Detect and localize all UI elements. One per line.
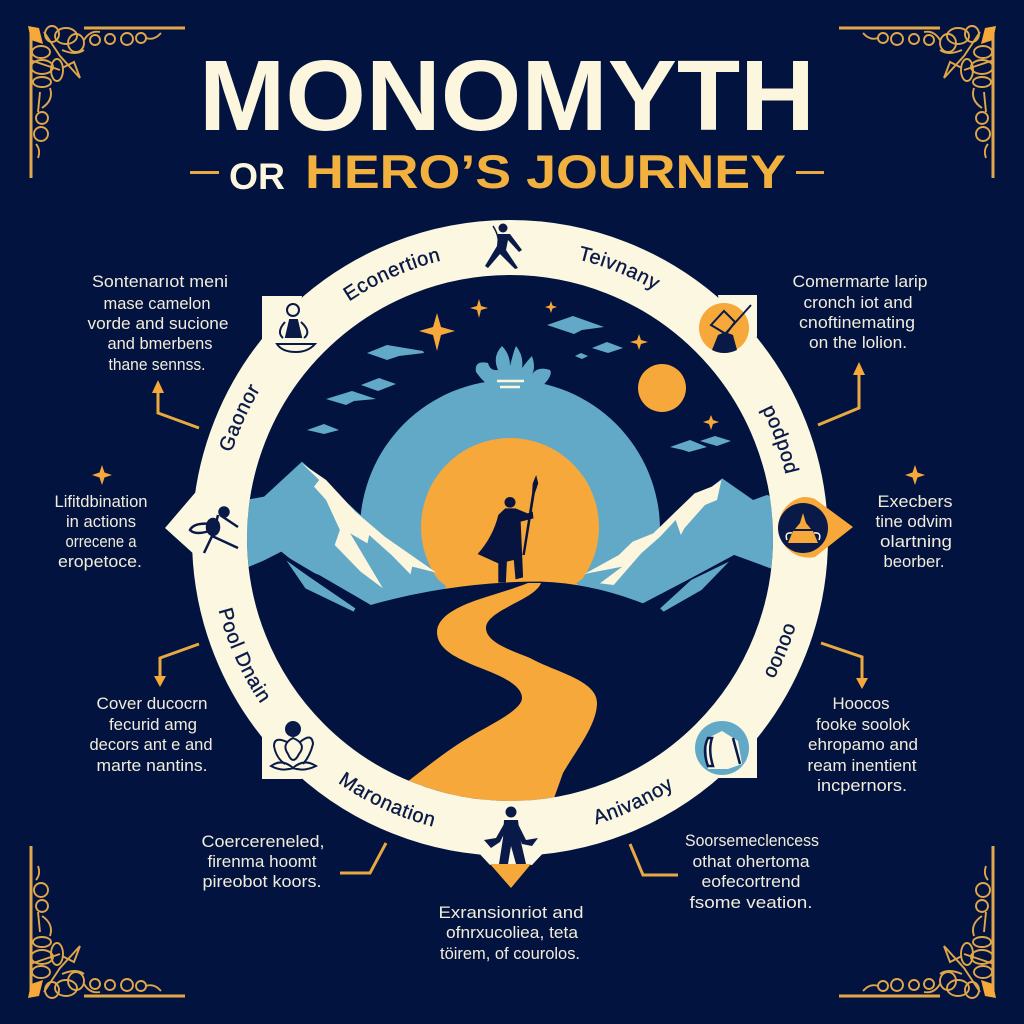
arrow: lower left — [154, 644, 199, 687]
ring labels — [218, 246, 800, 826]
text block: bottom right: othat ohertoma — [692, 853, 810, 871]
arrow: upper right — [818, 362, 865, 425]
text block: lower right: fooke soolok — [816, 716, 911, 734]
ring labels: Pool Dnain — [218, 608, 268, 703]
text block: upper left — [88, 273, 228, 374]
corner ornament: bottom left — [28, 846, 185, 998]
left mountain — [233, 462, 447, 607]
corner ornament: bottom right — [839, 846, 996, 998]
arrow: bottom right — [630, 844, 678, 875]
corner ornament: top right — [839, 26, 996, 178]
text block: upper left: vorde and sucione — [88, 315, 228, 333]
sun — [421, 438, 599, 589]
text block: lower left: fecurid amg — [109, 716, 197, 734]
icon: shield in blue circle (bottom right) — [695, 721, 749, 775]
text block: middle right: olartning — [880, 533, 952, 551]
right snow — [584, 480, 721, 585]
bottom triangle accent — [490, 864, 531, 888]
text block: bottom right: fsome veation. — [690, 894, 812, 912]
text block: bottom right: Soorsemeclencess — [685, 832, 819, 850]
text block: bottom left: firenma hoomt — [208, 853, 317, 871]
subtitle: HERO’S JOURNEY — [305, 145, 786, 198]
mountains, hill and hero — [247, 462, 773, 680]
lotus crown — [476, 346, 551, 388]
small orange planet — [638, 364, 686, 412]
subtitle — [190, 145, 824, 198]
text block: upper left: mase camelon — [104, 295, 210, 313]
text block: middle right: tine odvim — [876, 513, 952, 531]
icon: meditating figure (top left) — [277, 304, 315, 352]
text block: bottom center: Exransionriot and — [438, 904, 584, 922]
ring labels: Maronation — [338, 772, 434, 826]
text block: upper right: cnoftinemating — [799, 314, 915, 332]
text block: lower left: marte nantins. — [96, 757, 208, 775]
arrow: lower right — [821, 643, 868, 689]
ring labels: Teivnany — [581, 246, 660, 290]
hero silhouette — [478, 475, 538, 583]
text block: upper right: on the lolion. — [809, 334, 907, 352]
right diamond accent — [778, 497, 853, 558]
text block: bottom left — [202, 833, 324, 891]
clouds — [307, 316, 731, 452]
text block: bottom center — [438, 904, 584, 963]
text block: lower left: Cover ducocrn — [96, 695, 208, 713]
text block: lower right: ehropamo and — [808, 736, 918, 754]
ring labels: Econertion — [342, 251, 440, 301]
text block: middle left: orrecene a — [66, 533, 137, 551]
text block: middle right: beorber. — [884, 553, 944, 571]
text block: lower right: Hoocos — [832, 695, 890, 713]
icon: temple in circle (right) — [778, 503, 828, 553]
ring labels: oonoo — [766, 624, 795, 678]
text block: middle left: in actions — [66, 513, 136, 531]
text block: upper left: Sontenarıot meni — [92, 273, 228, 291]
ring with tabs — [165, 248, 853, 888]
text block: lower left: decors ant e and — [90, 736, 212, 754]
text block: bottom center: ofnrxucoliea, teta — [446, 924, 579, 942]
icon: knight in orange circle (top right) — [699, 303, 751, 353]
arrow: upper left — [152, 380, 199, 428]
text block: bottom left: Coercereneled, — [202, 833, 324, 851]
central scene — [247, 299, 773, 801]
text block: upper left: thane sennss. — [108, 356, 206, 374]
text block: bottom right: eofecortrend — [702, 873, 800, 891]
text block: bottom left: pireobot koors. — [202, 873, 322, 891]
subtitle: OR — [229, 156, 285, 197]
stars — [419, 299, 719, 430]
left snow — [302, 463, 436, 588]
text block: upper right: cronch iot and — [804, 294, 912, 312]
ring labels: podpod — [758, 405, 800, 474]
text block: upper right — [792, 273, 928, 352]
corner ornament: top left — [28, 26, 185, 178]
text block: bottom right — [685, 832, 819, 912]
text block: middle right: Execbers — [878, 493, 952, 511]
text block: middle left: Lifitdbination — [54, 493, 148, 511]
ring labels: Anivanoy — [596, 778, 672, 825]
star: left — [92, 465, 112, 485]
hill highlights — [286, 561, 355, 612]
icon: warrior with bow (top) — [485, 224, 522, 269]
arrow: bottom left — [340, 843, 386, 873]
text block: lower right — [808, 695, 918, 795]
blue halo circle — [360, 382, 660, 593]
text block: bottom center: töirem, of courolos. — [440, 945, 580, 963]
text block: lower left — [90, 695, 212, 775]
text block: middle left — [54, 493, 148, 571]
icon: leaping figure (left) — [190, 508, 238, 553]
icon: standing figure (bottom) — [484, 806, 538, 864]
icon: lotus figure (bottom left) — [271, 722, 316, 770]
title: MONOMYTH — [199, 40, 815, 152]
text block: upper right: Comermarte larip — [792, 273, 928, 291]
right mountain — [576, 478, 784, 603]
text block: middle left: eropetoce. — [58, 553, 142, 571]
ring labels: Gaonor — [220, 384, 258, 450]
text block: lower right: incpernors. — [817, 777, 907, 795]
star: right — [905, 465, 925, 485]
winding path — [402, 583, 597, 815]
text block: upper left: and bmerbens — [108, 335, 212, 353]
text block: lower right: ream inentient — [808, 757, 917, 775]
foreground hill — [261, 552, 740, 680]
text block: middle right — [876, 493, 952, 571]
